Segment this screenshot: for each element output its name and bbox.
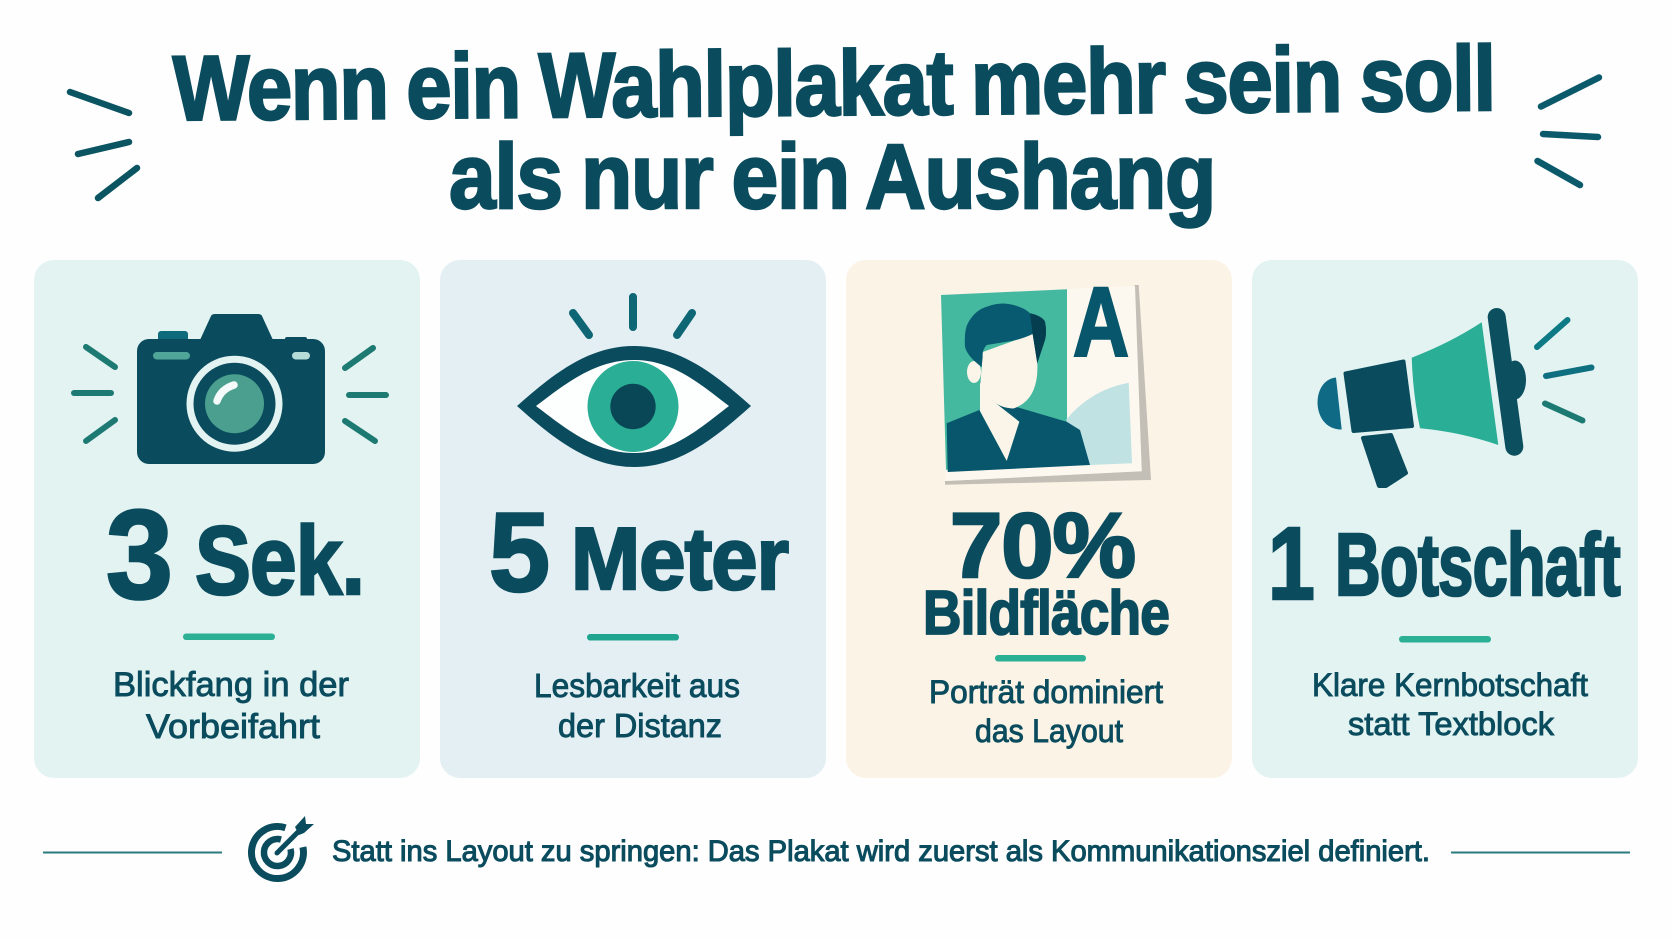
description [534, 667, 740, 744]
panel: 3 Sek. [34, 260, 420, 778]
accent rule [995, 655, 1086, 662]
description: der Distanz [558, 707, 722, 744]
icon: right title accent rays [1538, 78, 1599, 185]
description [113, 666, 349, 746]
card background [440, 260, 826, 778]
icon: camera [74, 314, 386, 464]
icon: megaphone [1318, 317, 1592, 486]
stat: 5 Meter: Meter [571, 509, 788, 608]
card background [34, 260, 420, 778]
stat: 1 Botschaft: 1 [1268, 506, 1314, 621]
stat: 1 Botschaft [1268, 506, 1620, 621]
panel: 5 Meter [440, 260, 826, 778]
stat: 70% Bildfläche: 70% [950, 495, 1135, 597]
footer text: Statt ins Layout zu springen: Das Plakat wird zuerst als Kommunikationsziel definiert. [332, 835, 1430, 868]
icon: left title accent rays [70, 92, 137, 198]
accent rule [587, 634, 679, 640]
title: als nur ein Aushang [449, 126, 1215, 228]
stat: 3 Sek.: 3 [106, 484, 172, 625]
icon: portrait poster: A [1073, 267, 1129, 377]
panel: 1 Botschaft [1252, 260, 1638, 778]
stat: 3 Sek. [106, 484, 364, 625]
icon: target with arrow [251, 816, 314, 879]
footer callout [43, 816, 1630, 879]
description: Blickfang in der [113, 666, 349, 704]
description: statt Textblock [1348, 706, 1555, 742]
title [172, 28, 1495, 228]
accent rule [183, 634, 275, 640]
accent rule [1399, 636, 1491, 642]
description: Vorbeifahrt [146, 708, 321, 746]
description: Lesbarkeit aus [534, 667, 740, 704]
description: Klare Kernbotschaft [1312, 667, 1588, 703]
stat: 5 Meter [489, 490, 788, 615]
description: das Layout [975, 713, 1123, 749]
panel: 70% Bildfläche [846, 260, 1232, 778]
icon: portrait poster [941, 267, 1151, 485]
stat: 5 Meter: 5 [489, 490, 549, 615]
card background [1252, 260, 1638, 778]
description [1312, 667, 1588, 742]
description [929, 674, 1163, 749]
stat: 3 Sek.: Sek. [195, 506, 364, 615]
description: Porträt dominiert [929, 674, 1163, 710]
title: Wenn ein Wahlplakat mehr sein soll [172, 28, 1495, 140]
stat: 70% Bildfläche: Bildfläche [923, 579, 1169, 648]
card background [846, 260, 1232, 778]
icon: eye [517, 297, 751, 467]
stat: 70% Bildfläche [923, 495, 1169, 648]
